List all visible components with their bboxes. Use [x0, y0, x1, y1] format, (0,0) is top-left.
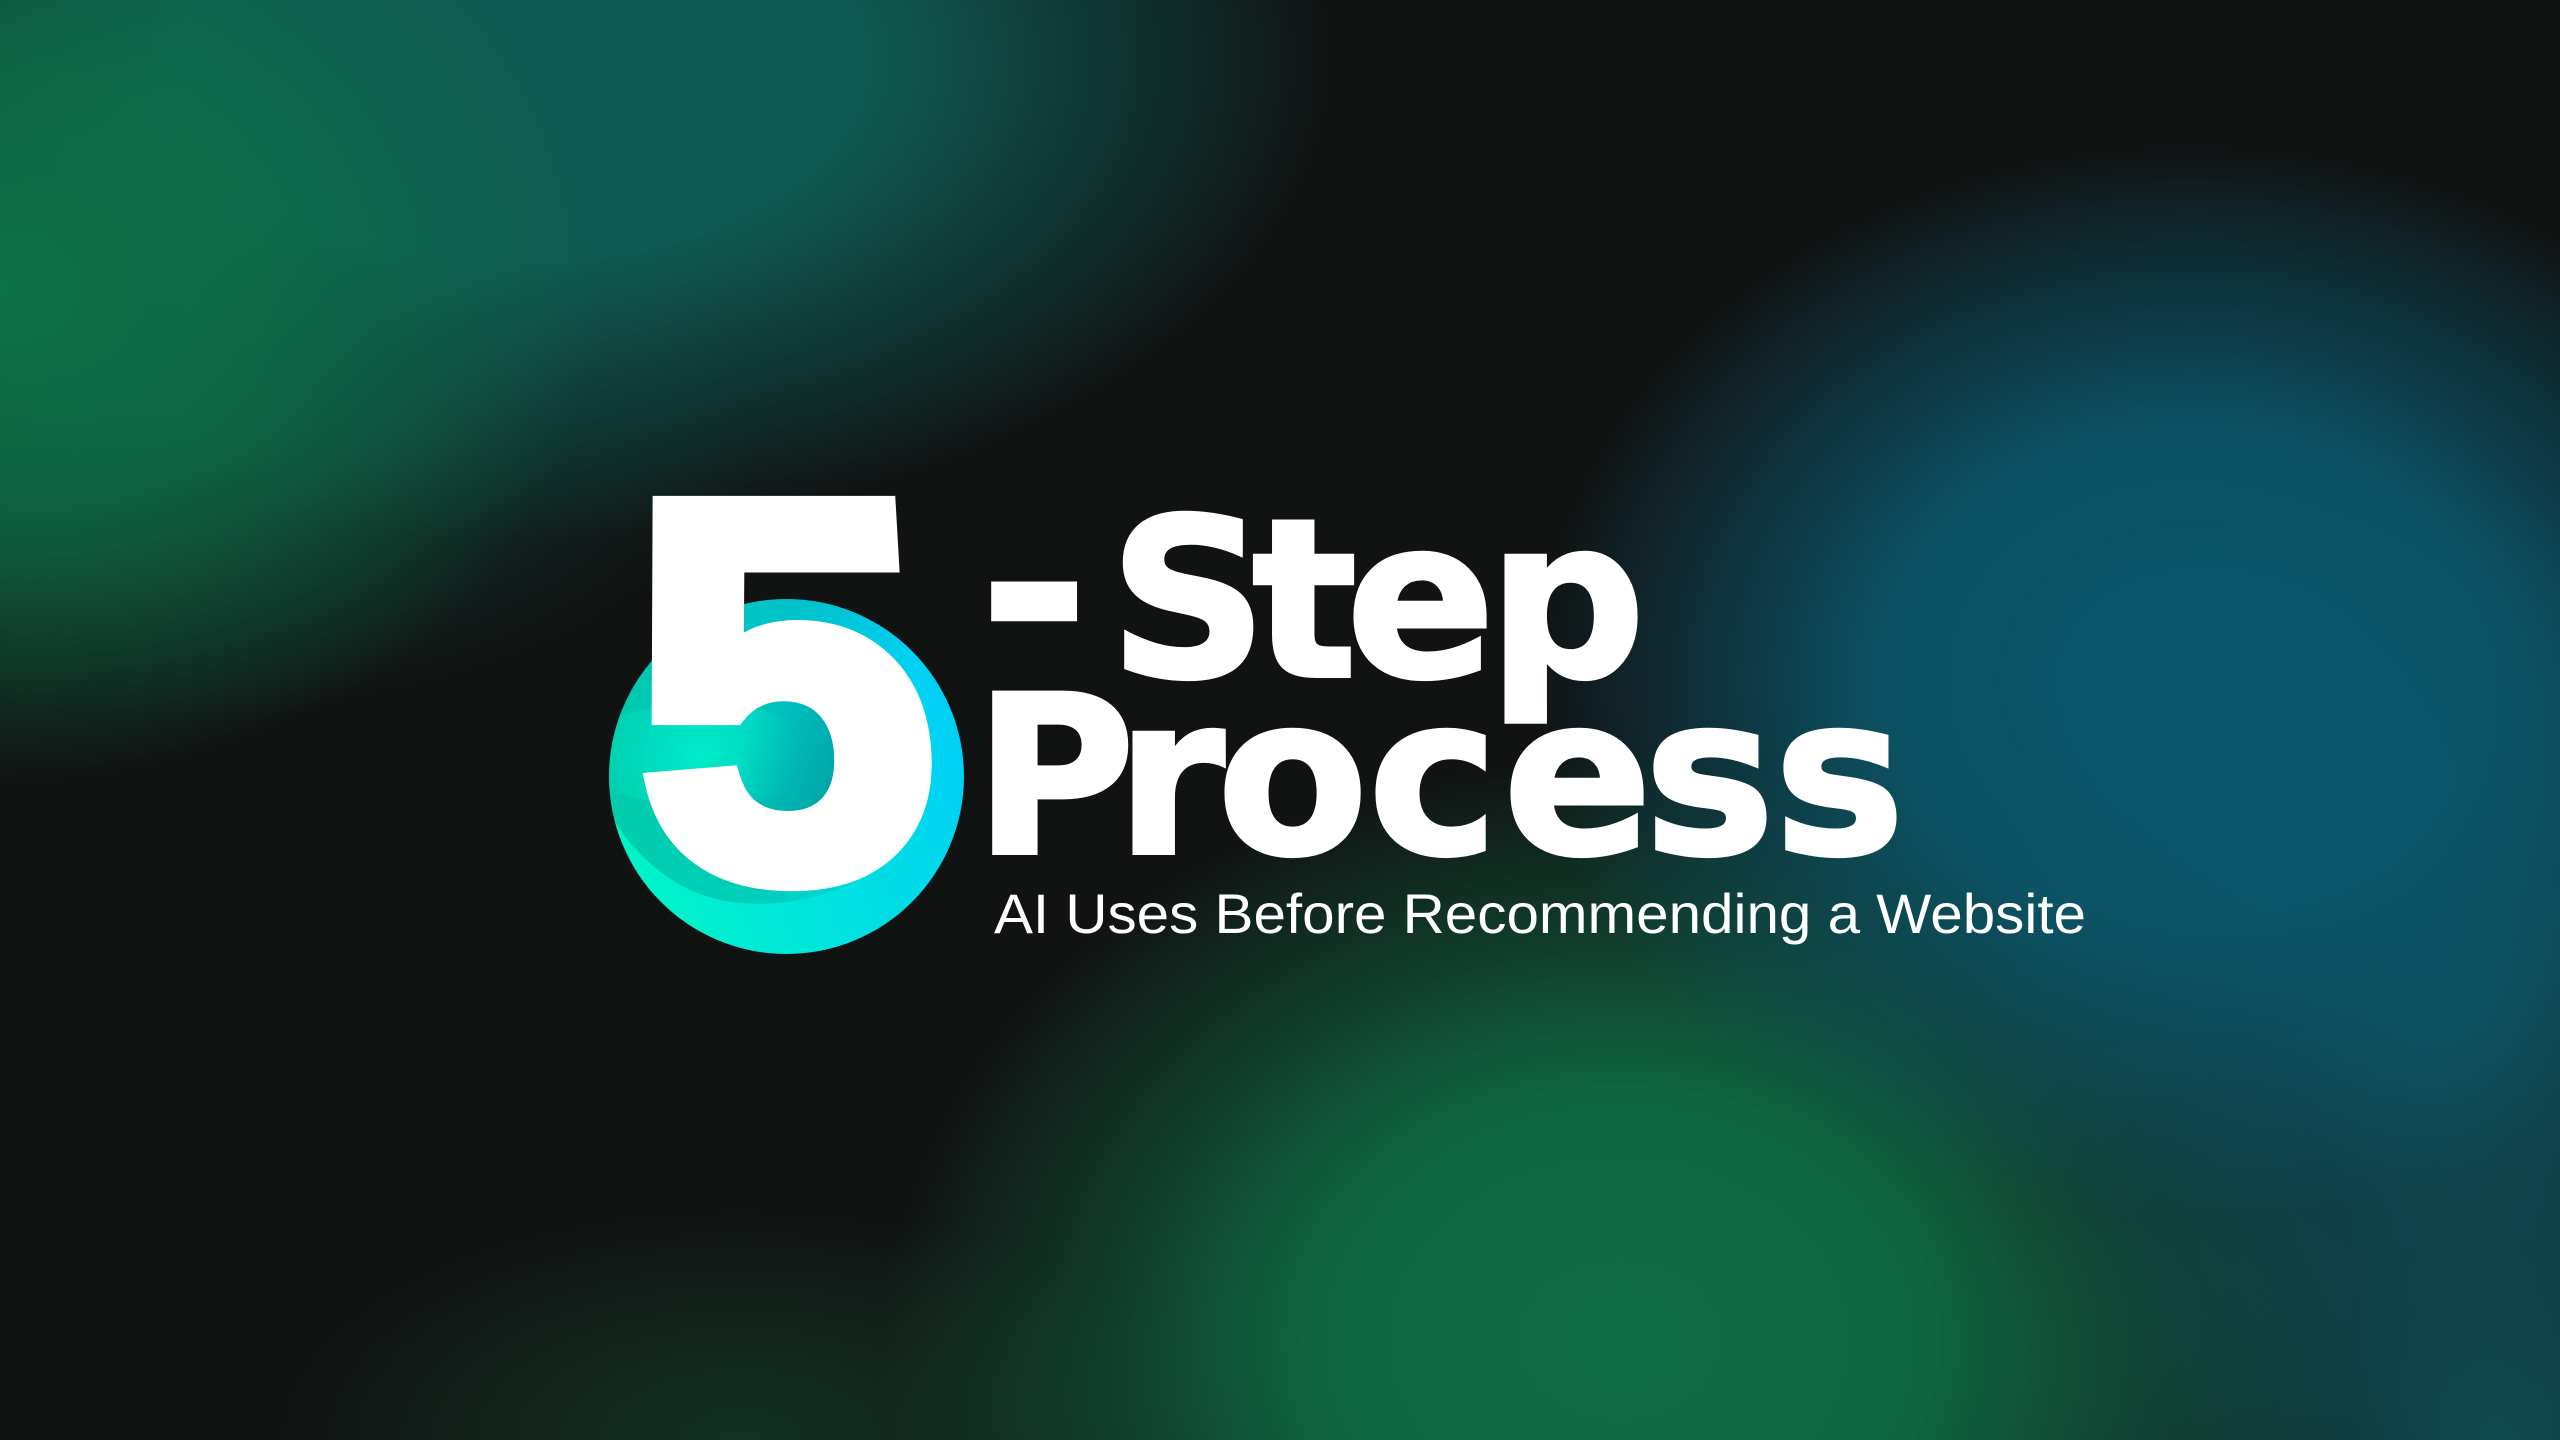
numeral 5: 5	[617, 391, 949, 989]
heading line one: -Step: -	[976, 423, 1092, 749]
subtitle: AI Uses Before Recommending a Website	[994, 882, 2086, 945]
heading line one: -Step: Step	[1109, 472, 1645, 728]
icon: gradient disc behind the numeral	[609, 599, 964, 954]
title lockup	[609, 496, 2084, 954]
heading line two: Process: Process	[974, 649, 1905, 905]
